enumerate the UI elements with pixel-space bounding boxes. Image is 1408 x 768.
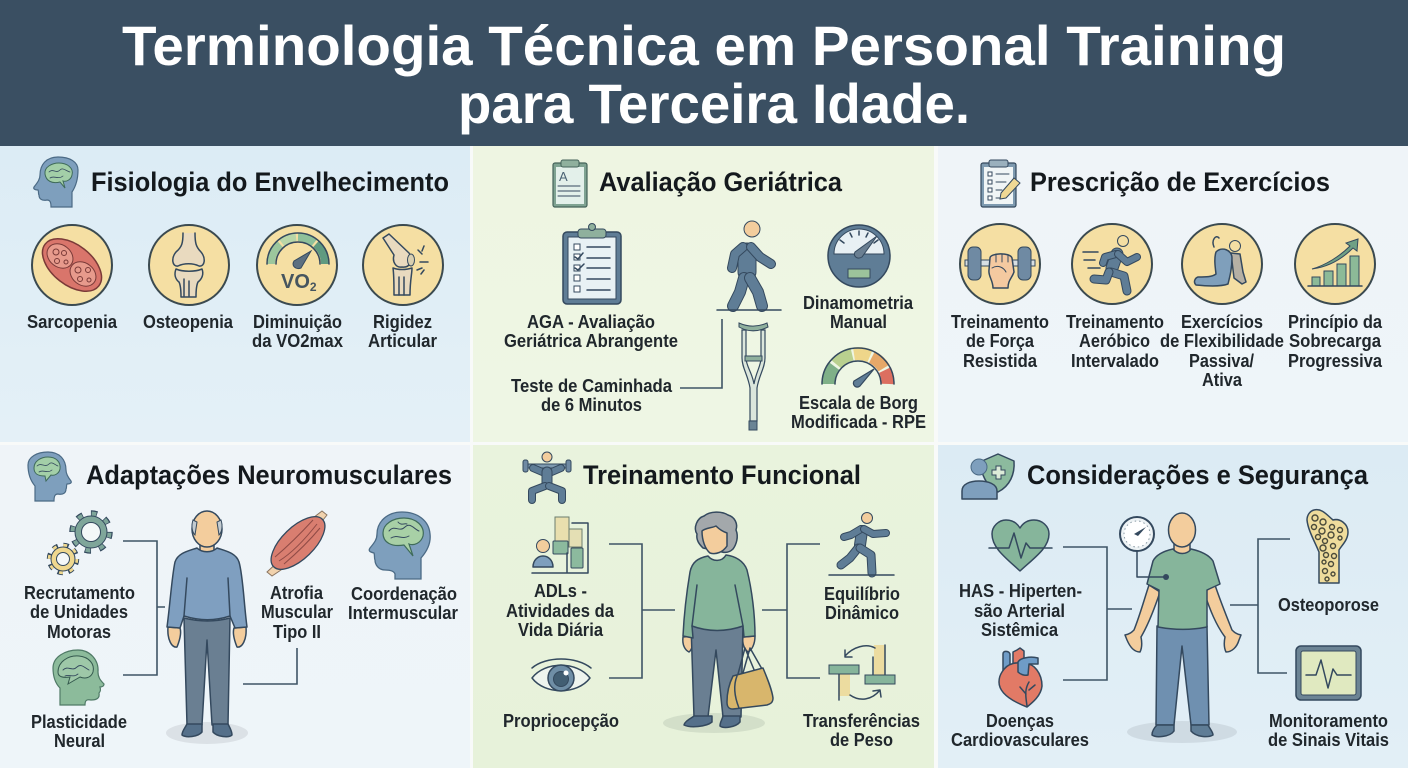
label: Atrofia Muscular Tipo II: Atrofia [270, 582, 324, 603]
label: Treinamento Aeróbico Intervalado [1066, 311, 1164, 371]
label: Atrofia Muscular Tipo II: Muscular [261, 601, 333, 622]
label: Princípio da Sobrecarga Progressiva: Princípio da [1288, 311, 1383, 332]
figure: man with blood pressure gauge [1120, 513, 1241, 743]
header banner [0, 0, 1408, 146]
label: Sarcopenia: Sarcopenia [27, 311, 118, 332]
heading: Treinamento Funcional [583, 460, 861, 490]
figure: older woman [663, 512, 773, 733]
panel: Fisiologia do Envelhecimento [0, 146, 470, 442]
label: Osteoporose: Osteoporose [1278, 594, 1379, 615]
label: AGA [504, 311, 678, 351]
icon: squat with barbell [523, 452, 571, 500]
label: Rigidez Articular: Rigidez [373, 311, 432, 332]
label: Escala de Borg: Modificada - RPE [791, 411, 926, 432]
label: Dinamometria Manual: Manual [830, 311, 887, 332]
heading: Avaliação Geriátrica [599, 167, 843, 197]
label: Treinamento de Força Resistida: Treinamento [951, 311, 1049, 332]
label: Treinamento de Força Resistida [951, 311, 1049, 371]
heading: Fisiologia do Envelhecimento [91, 167, 449, 197]
label: Rigidez Articular: Articular [368, 330, 437, 351]
label: Teste de Caminhada [511, 375, 673, 415]
label: Princípio da Sobrecarga Progressiva: Progressiva [1288, 350, 1383, 371]
label: Recrutamento de Unidades Motoras: Motoras [47, 621, 111, 642]
icon: dynamic balance [829, 512, 894, 575]
label: Treinamento Aeróbico Intervalado: Intervalado [1071, 350, 1159, 371]
label: HAS: são Arterial [974, 600, 1065, 621]
label: Plasticidade Neural: Neural [54, 730, 105, 751]
label: Recrutamento de Unidades Motoras: Recrutamento [24, 582, 135, 603]
label: Diminuição da VO2max: da VO2max [252, 330, 344, 351]
panel: Considerações e Segurança [938, 445, 1408, 768]
label: Doenças Cardiovasculares [951, 710, 1089, 750]
item: runner icon [1072, 224, 1152, 304]
icon: heading head with brain [28, 452, 71, 501]
label: Rigidez Articular [368, 311, 437, 351]
icon: gears [50, 514, 109, 572]
label: Exercícios de Flexibilidade Passiva/Ativa: Ativa [1202, 369, 1243, 390]
connector: left bracket [123, 541, 165, 675]
label: Monitoramento de Sinais Vitais: de Sinais Vitais [1268, 729, 1389, 750]
heading: Prescrição de Exercícios [1030, 167, 1330, 197]
title: para Terceira Idade. [458, 72, 970, 135]
label: ADLs: ADLs - [534, 580, 587, 601]
label: Treinamento de Força Resistida: de Força [966, 330, 1035, 351]
label: ADLs: Vida Diária [518, 619, 604, 640]
label: HAS: Sistêmica [981, 619, 1059, 640]
label: Osteopenia: Osteopenia [143, 311, 234, 332]
label: Equilíbrio Dinâmico: Equilíbrio [824, 583, 900, 604]
label: Atrofia Muscular Tipo II: Tipo II [273, 621, 321, 642]
icon: vital signs monitor [1296, 646, 1361, 700]
icon: heart with ECG [989, 520, 1052, 571]
label: Treinamento Aeróbico Intervalado: Aeróbico [1079, 330, 1150, 351]
label: Princípio da Sobrecarga Progressiva: Sobrecarga [1289, 330, 1382, 351]
label: Escala de Borg [791, 392, 926, 432]
heading: Considerações e Segurança [1027, 460, 1369, 490]
label: Exercícios de Flexibilidade Passiva/Ativa: Passiva/ [1189, 350, 1254, 371]
label: Coordenação Intermuscular [348, 583, 458, 623]
figure: older man [166, 511, 248, 744]
icon: heading clipboard [553, 160, 587, 207]
panel: Avaliação Geriátrica [473, 146, 934, 442]
label: Transferências de Peso: de Peso [830, 729, 893, 750]
label: Atrofia Muscular Tipo II [261, 582, 333, 642]
label: Plasticidade Neural [31, 711, 127, 751]
panel: Prescrição de Exercícios [938, 146, 1408, 442]
icon: weight transfer [829, 645, 895, 700]
label: Doenças Cardiovasculares: Cardiovasculares [951, 729, 1089, 750]
icon: crutch [739, 323, 768, 430]
item: VO2 gauge icon: 2 [310, 280, 317, 294]
connector: walking test [680, 319, 722, 388]
icon: checklist clipboard [563, 224, 621, 304]
item: progressive overload icon [1295, 224, 1375, 304]
label: Exercícios de Flexibilidade Passiva/Ativa [1160, 311, 1284, 390]
icon: person with shield [962, 454, 1014, 499]
connector: atrophy [243, 648, 297, 684]
label: HAS [959, 580, 1082, 640]
label: ADLs [506, 580, 615, 640]
item: VO2 gauge icon: VO [281, 271, 310, 293]
title [122, 14, 1286, 135]
item: Rigidez Articular icon [363, 225, 443, 305]
label: Diminuição da VO2max: Diminuição [253, 311, 342, 332]
label: Monitoramento de Sinais Vitais: Monitoramento [1269, 710, 1388, 731]
icon: eye [532, 659, 591, 691]
icon: anatomical heart [999, 648, 1042, 707]
label: Diminuição da VO2max [252, 311, 344, 351]
label: Propriocepção: Propriocepção [503, 710, 619, 731]
label: ADLs: Atividades da [506, 600, 615, 621]
icon: Borg scale gauge [822, 348, 894, 387]
label: Teste de Caminhada: Teste de Caminhada [511, 375, 673, 396]
label: Dinamometria Manual: Dinamometria [803, 292, 914, 313]
connector: right bracket [762, 544, 820, 678]
icon: porous bone [1307, 510, 1348, 583]
label: Recrutamento de Unidades Motoras [24, 582, 135, 642]
label: Transferências de Peso: Transferências [803, 710, 920, 731]
icon: heading clipboard with pencil [981, 160, 1020, 207]
label: Monitoramento de Sinais Vitais [1268, 710, 1389, 750]
heading: Adaptações Neuromusculares [86, 460, 452, 490]
icon: head with brain [34, 157, 78, 207]
icon: walking person [717, 221, 781, 310]
label: Dinamometria Manual [803, 292, 914, 332]
item: dumbbell icon [960, 224, 1040, 304]
label: Coordenação Intermuscular: Intermuscular [348, 602, 458, 623]
label: AGA: AGA - Avaliação [527, 311, 655, 332]
panel: Adaptações Neuromusculares [0, 445, 470, 768]
label: Exercícios de Flexibilidade Passiva/Ativa: Exercícios [1181, 311, 1263, 332]
label: Plasticidade Neural: Plasticidade [31, 711, 127, 732]
label: Doenças Cardiovasculares: Doenças [986, 710, 1054, 731]
label: Escala de Borg: Escala de Borg [799, 392, 918, 413]
icon: dynamometer [828, 225, 890, 287]
label: Teste de Caminhada: de 6 Minutos [541, 394, 642, 415]
item: Sarcopenia icon [32, 225, 112, 305]
title: Terminologia Técnica em Personal Training [122, 14, 1286, 77]
icon: daily activities [532, 517, 588, 573]
item: VO2 gauge icon [257, 225, 337, 305]
label: Coordenação Intermuscular: Coordenação [351, 583, 457, 604]
label: Treinamento de Força Resistida: Resistida [963, 350, 1038, 371]
label: HAS: HAS - Hiperten- [959, 580, 1082, 601]
item: Osteopenia icon [149, 225, 229, 305]
label: AGA: Geriátrica Abrangente [504, 330, 678, 351]
icon: heading clipboard: A [559, 169, 568, 184]
label: Recrutamento de Unidades Motoras: de Unidades [30, 601, 128, 622]
panel: Treinamento Funcional [473, 445, 934, 768]
icon: large head with brain [369, 512, 430, 579]
connector: left bracket [1063, 547, 1132, 680]
label: Equilíbrio Dinâmico: Dinâmico [825, 602, 899, 623]
item: stretching icon [1182, 224, 1262, 304]
connector: right bracket [1230, 539, 1290, 673]
connector: left bracket [609, 544, 675, 678]
label: Princípio da Sobrecarga Progressiva [1288, 311, 1383, 371]
icon: muscle [262, 508, 334, 578]
label: Treinamento Aeróbico Intervalado: Treinamento [1066, 311, 1164, 332]
label: Exercícios de Flexibilidade Passiva/Ativa: de Flexibilidade [1160, 330, 1284, 351]
label: Equilíbrio Dinâmico [824, 583, 900, 623]
label: Transferências de Peso [803, 710, 920, 750]
icon: green head with brain [53, 650, 104, 705]
